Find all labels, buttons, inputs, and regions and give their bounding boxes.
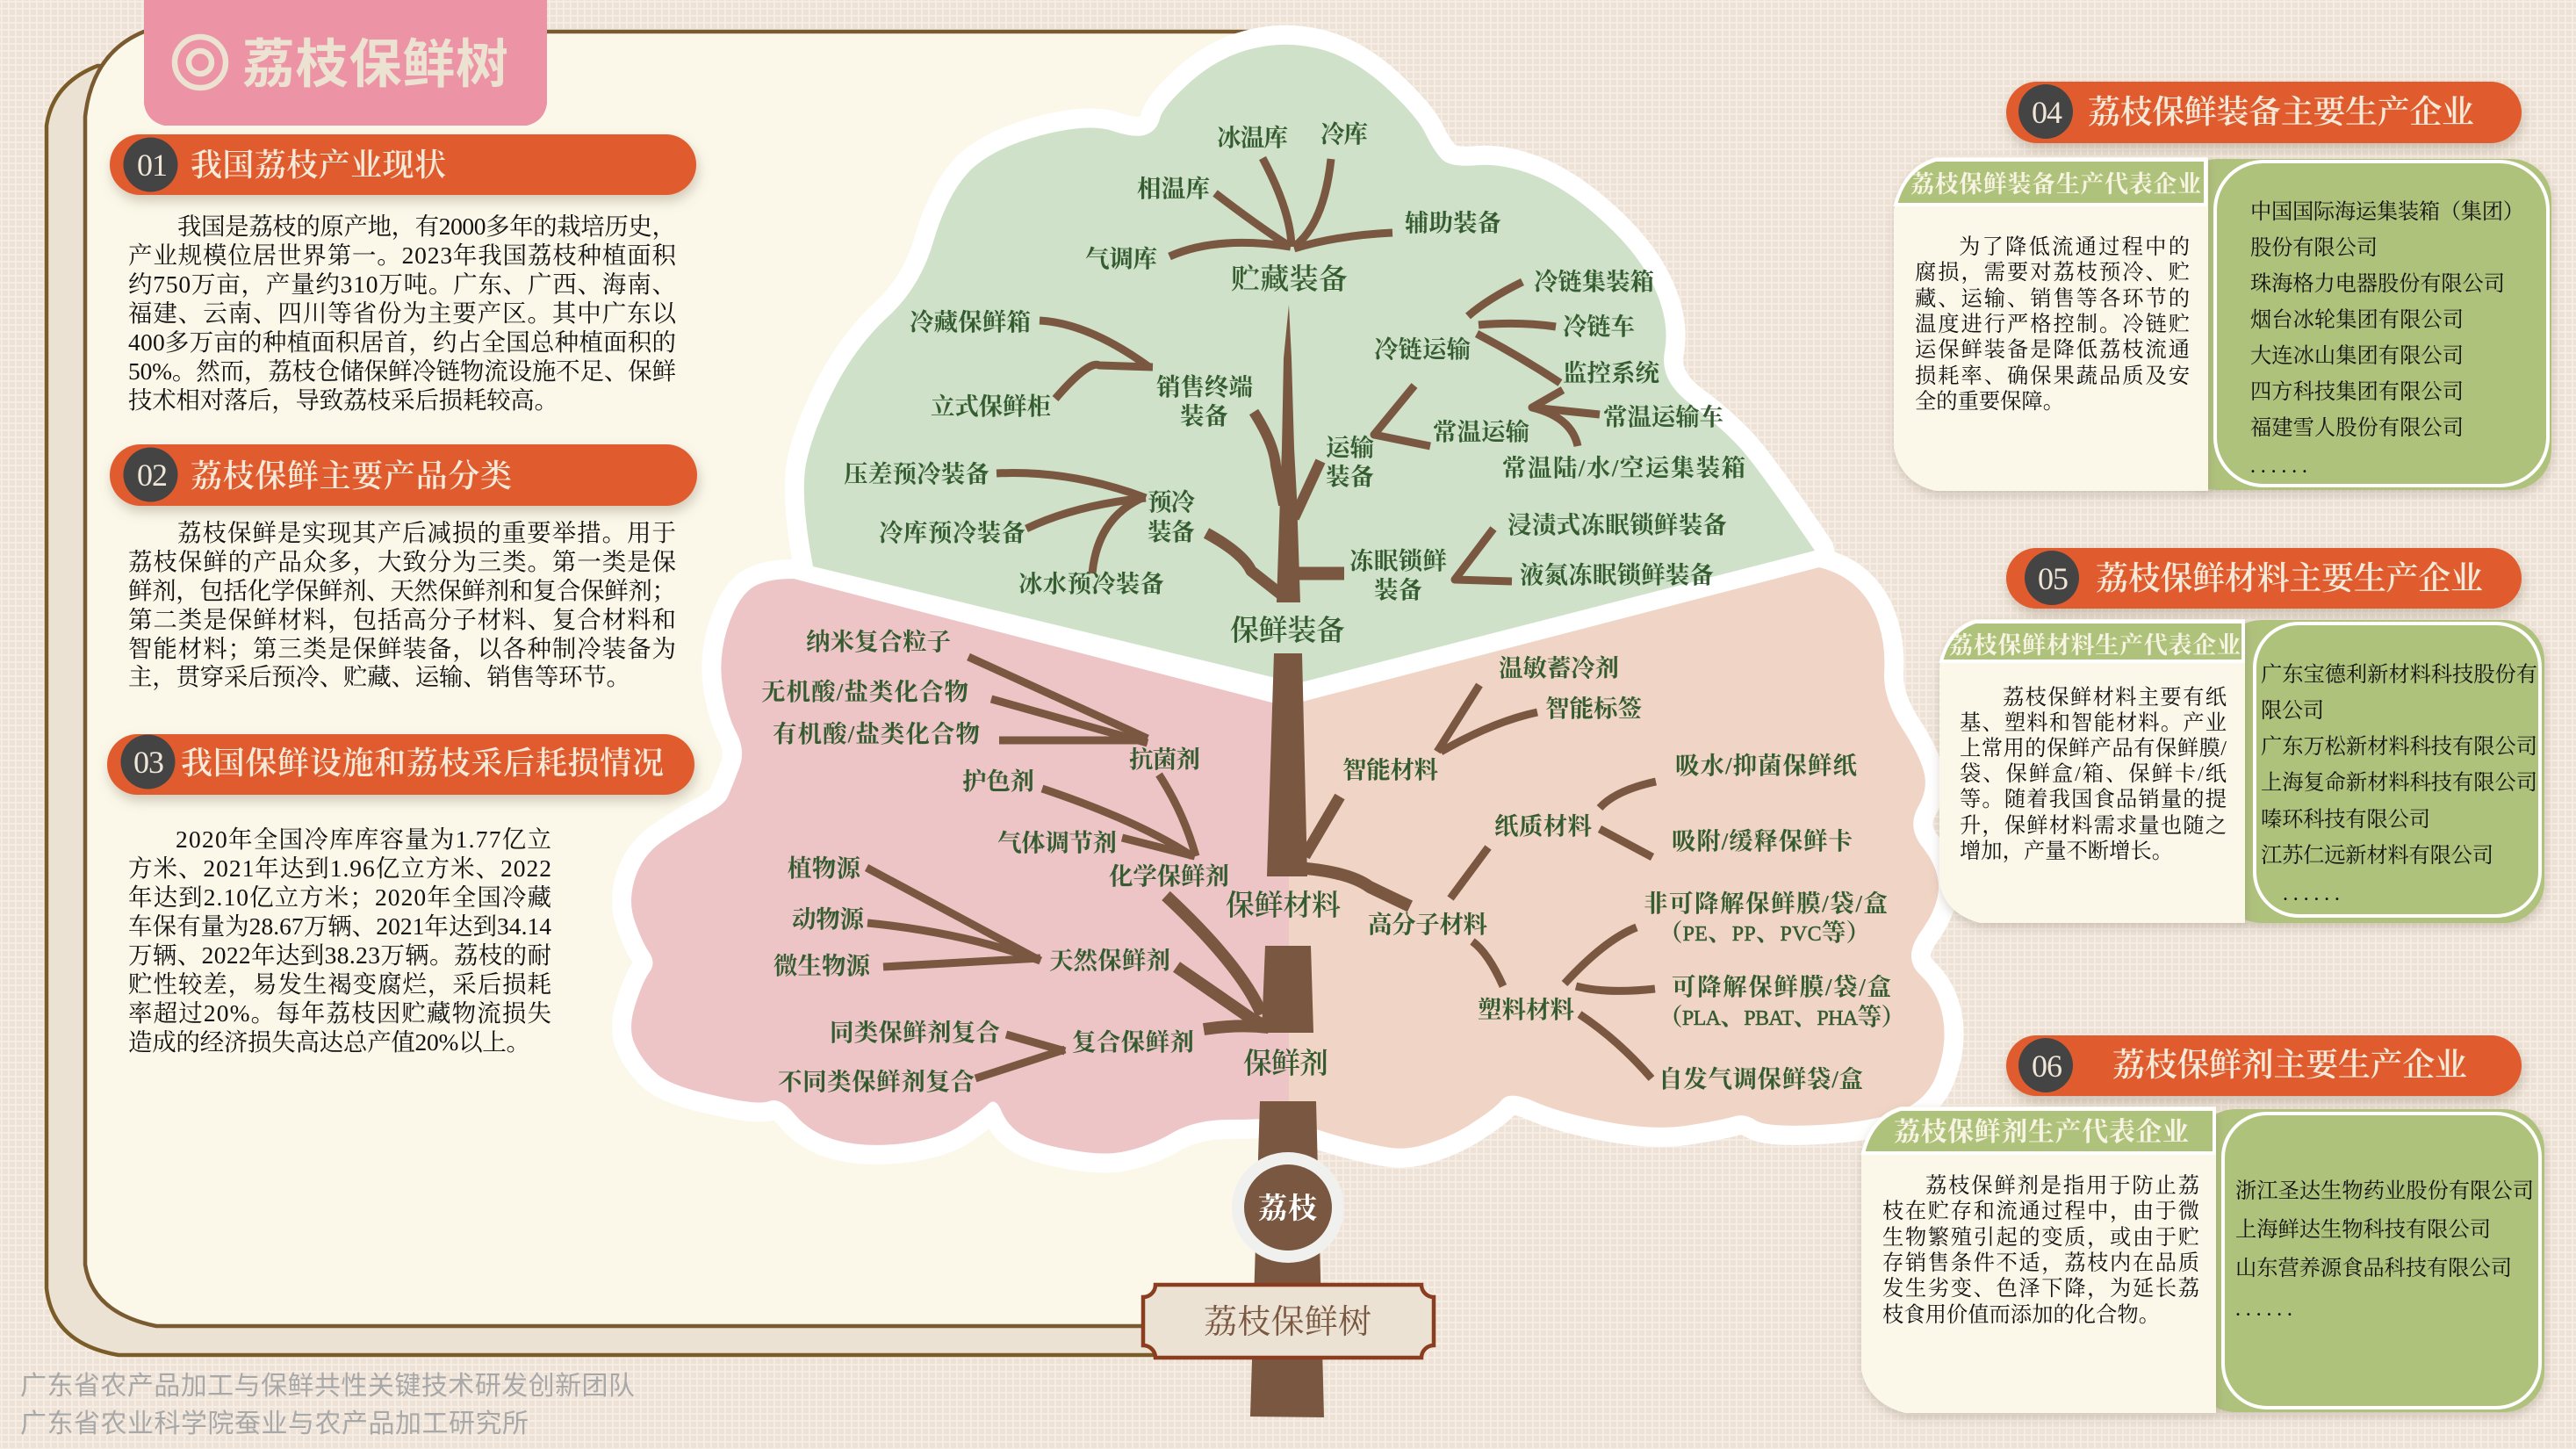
description: 生物繁殖引起的变质，或由于贮 — [1882, 1226, 2199, 1250]
title tab — [144, 0, 547, 126]
labels: agents: 化学保鲜剂 — [1109, 862, 1229, 890]
labels: agents: 不同类保鲜剂复合 — [778, 1068, 975, 1095]
heading 05: 荔枝保鲜材料主要生产企业 — [2096, 560, 2483, 597]
description: 基、塑料和智能材料。产业 — [1960, 711, 2227, 735]
heading 06: 06 — [2032, 1049, 2062, 1084]
heading 03: 我国保鲜设施和荔枝采后耗损情况 — [181, 746, 664, 781]
text block 01: 产业规模位居世界第一。2023年我国荔枝种植面积 — [128, 242, 678, 269]
heading 05: 05 — [2038, 561, 2069, 596]
icon: concentric target — [175, 37, 226, 88]
company list: 广东万松新材料科技有限公司 — [2261, 735, 2537, 759]
labels: agents: 微生物源 — [774, 952, 871, 979]
footer credits: 广东省农业科学院蚕业与农产品加工研究所 — [20, 1409, 529, 1438]
labels: equipment: 冷藏保鲜箱 — [910, 308, 1031, 335]
labels: agents: 抗菌剂 — [1129, 746, 1200, 773]
text block 01: 我国是荔枝的原产地，有2000多年的栽培历史， — [177, 213, 676, 240]
labels: equipment: 预冷 — [1148, 488, 1196, 515]
description: 枝食用价值而添加的化合物。 — [1882, 1303, 2160, 1327]
labels: equipment: 冷链集装箱 — [1534, 268, 1654, 295]
labels: agents: 气体调节剂 — [997, 829, 1117, 856]
description: 荔枝保鲜材料主要有纸 — [2003, 686, 2227, 710]
section 02: product categories — [110, 444, 697, 690]
labels: equipment: 贮藏装备 — [1231, 263, 1348, 296]
labels: equipment: 常温运输 — [1433, 418, 1529, 445]
title text: 荔枝保鲜树 — [242, 35, 508, 94]
heading 01: 我国荔枝产业现状 — [191, 148, 446, 183]
labels: equipment: 冷链车 — [1563, 313, 1635, 340]
labels: materials: 吸水/抑菌保鲜纸 — [1675, 752, 1858, 779]
text block 03: 方米、2021年达到1.96亿立方米、2022 — [128, 854, 551, 882]
text block 03: 2020年全国冷库库容量为1.77亿立 — [176, 825, 551, 853]
company list: 烟台冰轮集团有限公司 — [2250, 308, 2464, 332]
text block 02: 第二类是保鲜材料，包括高分子材料、复合材料和 — [128, 606, 676, 633]
branches: materials — [1296, 685, 1656, 1078]
text block 02: 鲜剂，包括化学保鲜剂、天然保鲜剂和复合保鲜剂； — [128, 577, 676, 604]
text block 01: 400多万亩的种植面积居首，约占全国总种植面积的 — [128, 328, 676, 356]
text block 03: 贮性较差，易发生褐变腐烂，采后损耗 — [128, 970, 551, 998]
crown: preservation materials (peach) — [1289, 567, 1945, 1149]
description: 温度进行严格控制。冷链贮 — [1915, 313, 2190, 336]
labels: materials: 智能材料 — [1342, 756, 1438, 783]
company list: 珠海格力电器股份有限公司 — [2250, 272, 2505, 296]
labels: equipment: 冰水预冷装备 — [1018, 570, 1164, 597]
company list: 嗪环科技有限公司 — [2261, 808, 2430, 832]
labels: materials: （PE、PP、PVC等） — [1659, 919, 1870, 946]
text block 02: 智能材料；第三类是保鲜装备，以各种制冷装备为 — [128, 635, 676, 662]
text block 02 — [128, 519, 676, 690]
card header: 荔枝保鲜剂生产代表企业 — [1894, 1118, 2189, 1147]
panel: left back page — [47, 32, 1291, 1355]
crown: preservation agents (pink) — [631, 579, 1289, 1154]
company list: 浙江圣达生物药业股份有限公司 — [2235, 1179, 2534, 1203]
labels: equipment: 冷链运输 — [1374, 335, 1471, 363]
section 01: industry status — [110, 134, 696, 414]
heading 06: 荔枝保鲜剂主要生产企业 — [2112, 1047, 2467, 1084]
labels: equipment: 常温运输车 — [1603, 403, 1723, 430]
heading 01: 01 — [137, 148, 168, 183]
labels: equipment: 监控系统 — [1563, 359, 1661, 386]
labels: agents: 有机酸/盐类化合物 — [773, 720, 980, 747]
labels: equipment: 运输 — [1326, 434, 1374, 461]
labels: equipment: 浸渍式冻眠锁鲜装备 — [1507, 511, 1727, 538]
description: 为了降低流通过程中的 — [1959, 235, 2190, 259]
labels: equipment — [844, 120, 1745, 647]
company list: 上海复命新材料科技有限公司 — [2261, 771, 2537, 795]
description: 枝在贮存和流通过程中，由于微 — [1882, 1200, 2199, 1223]
heading 05 — [2006, 548, 2522, 609]
card header — [1863, 1109, 2214, 1153]
text block 01: 技术相对落后，导致荔枝采后损耗较高。 — [128, 386, 558, 414]
text block 01 — [128, 213, 678, 414]
text block 02: 荔枝保鲜的产品众多，大致分为三类。第一类是保 — [128, 548, 676, 575]
labels: equipment: 装备 — [1326, 463, 1374, 490]
description: 袋、保鲜盒/箱、保鲜卡/纸 — [1960, 762, 2227, 786]
company list: 江苏仁远新材料有限公司 — [2261, 844, 2493, 868]
footer credits — [20, 1372, 635, 1438]
labels: equipment: 保鲜装备 — [1230, 615, 1345, 647]
labels: agents: 保鲜材料 — [1226, 890, 1341, 922]
footer credits: 广东省农产品加工与保鲜共性关键技术研发创新团队 — [20, 1372, 635, 1401]
labels: materials: 吸附/缓释保鲜卡 — [1672, 827, 1853, 854]
heading 04 — [2006, 82, 2522, 143]
labels: materials: 自发气调保鲜袋/盒 — [1659, 1065, 1863, 1092]
labels: equipment: 装备 — [1148, 518, 1195, 545]
description: 发生劣变、色泽下降，为延长荔 — [1882, 1277, 2199, 1301]
labels: materials: （PLA、PBAT、PHA等） — [1659, 1003, 1905, 1030]
labels: equipment: 装备 — [1180, 402, 1228, 429]
description: 运保鲜装备是降低荔枝流通 — [1915, 338, 2190, 362]
labels: equipment: 冷库 — [1320, 120, 1368, 148]
company list — [2215, 162, 2548, 486]
labels: materials: 温敏蓄冷剂 — [1499, 654, 1619, 681]
description: 上常用的保鲜产品有保鲜膜/ — [1960, 737, 2227, 761]
text block 03: 车保有量为28.67万辆、2021年达到34.14 — [128, 912, 551, 940]
description: 荔枝保鲜剂是指用于防止荔 — [1925, 1174, 2199, 1198]
company list: 广东宝德利新材料科技股份有 — [2261, 663, 2537, 687]
labels: agents: 无机酸/盐类化合物 — [761, 678, 968, 705]
text block 03 — [128, 825, 551, 1056]
crown: preservation equipment (green) — [804, 45, 1815, 683]
description — [1960, 686, 2227, 863]
labels: equipment: 气调库 — [1085, 245, 1157, 272]
company list: 福建雪人股份有限公司 — [2250, 416, 2464, 440]
labels: agents: 动物源 — [792, 905, 866, 933]
labels: equipment: 常温陆/水/空运集装箱 — [1502, 454, 1745, 481]
branches: agents — [867, 657, 1269, 1078]
labels: equipment: 装备 — [1374, 576, 1422, 603]
plaque: tree name — [1143, 1285, 1434, 1358]
labels: equipment: 冷库预冷装备 — [879, 519, 1025, 546]
heading 02 — [110, 444, 697, 506]
text block 03: 率超过20%。每年荔枝因贮藏物流损失 — [128, 999, 551, 1027]
description: 等。随着我国食品销量的提 — [1960, 788, 2227, 811]
labels: agents: 保鲜剂 — [1243, 1048, 1328, 1080]
card header: 荔枝保鲜材料生产代表企业 — [1949, 631, 2241, 659]
labels: equipment: 相温库 — [1137, 175, 1210, 202]
description — [1915, 235, 2190, 414]
text block 01: 50%。然而，荔枝仓储保鲜冷链物流设施不足、保鲜 — [128, 357, 676, 385]
heading 04: 04 — [2032, 95, 2062, 130]
labels: materials: 可降解保鲜膜/袋/盒 — [1672, 973, 1891, 1000]
labels: materials: 智能标签 — [1545, 695, 1642, 722]
company list: 中国国际海运集装箱（集团） — [2250, 200, 2524, 224]
description: 全的重要保障。 — [1915, 390, 2064, 414]
company list: 股份有限公司 — [2250, 236, 2378, 260]
company list: 限公司 — [2261, 699, 2324, 723]
labels: agents — [761, 628, 1341, 1095]
description: 损耗率、确保果蔬品质及安 — [1915, 364, 2190, 388]
section 03: facilities and losses — [107, 734, 694, 1056]
company list — [2223, 1114, 2540, 1408]
heading 06 — [2006, 1035, 2522, 1096]
text block 01: 约750万亩，产量约310万吨。广东、广西、海南、 — [128, 270, 676, 298]
text block 03: 造成的经济损失高达总产值20%以上。 — [128, 1028, 530, 1056]
heading 03 — [107, 734, 694, 795]
heading 04: 荔枝保鲜装备主要生产企业 — [2088, 94, 2474, 131]
card 06 — [1861, 1107, 2544, 1413]
labels: agents: 天然保鲜剂 — [1049, 947, 1170, 974]
card header: 荔枝保鲜装备生产代表企业 — [1910, 170, 2201, 198]
description: 藏、运输、销售等各环节的 — [1915, 286, 2190, 311]
heading 03: 03 — [133, 745, 164, 780]
text block 02: 荔枝保鲜是实现其产后减损的重要举措。用于 — [177, 519, 676, 546]
company list: 四方科技集团有限公司 — [2250, 380, 2464, 404]
section 06: agent companies — [1861, 1035, 2544, 1413]
labels: equipment: 销售终端 — [1156, 373, 1253, 400]
labels: agents: 复合保鲜剂 — [1072, 1028, 1194, 1056]
text block 03: 万辆、2022年达到38.23万辆。荔枝的耐 — [128, 941, 551, 969]
company list — [2255, 624, 2540, 916]
labels: materials: 纸质材料 — [1494, 812, 1593, 840]
section 04: equipment companies — [1894, 82, 2551, 491]
card header — [1941, 622, 2243, 661]
heading 02: 荔枝保鲜主要产品分类 — [191, 458, 512, 494]
labels: materials: 非可降解保鲜膜/袋/盒 — [1644, 890, 1888, 917]
description: 升，保鲜材料需求量也随之 — [1960, 814, 2227, 838]
company list: 山东营养源食品科技有限公司 — [2235, 1257, 2512, 1280]
company list: 上海鲜达生物科技有限公司 — [2235, 1218, 2491, 1242]
company list: 大连冰山集团有限公司 — [2250, 344, 2464, 368]
labels: agents: 护色剂 — [962, 768, 1034, 795]
labels: materials — [1342, 654, 1905, 1092]
labels: equipment: 冻眠锁鲜 — [1349, 547, 1447, 574]
labels: equipment: 辅助装备 — [1405, 209, 1501, 236]
labels: agents: 纳米复合粒子 — [806, 628, 951, 655]
branches: equipment — [997, 158, 1600, 594]
card 04 — [1894, 157, 2551, 491]
labels: equipment: 液氮冻眠锁鲜装备 — [1520, 561, 1714, 588]
labels: materials: 塑料材料 — [1478, 996, 1575, 1023]
root badge: 荔枝 — [1232, 1152, 1344, 1263]
description — [1882, 1174, 2199, 1327]
text block 01: 福建、云南、四川等省份为主要产区。其中广东以 — [128, 299, 678, 327]
root badge: 荔枝: 荔枝 — [1258, 1193, 1317, 1225]
text block 03: 年达到2.10亿立方米；2020年全国冷藏 — [128, 883, 551, 911]
heading 02: 02 — [137, 458, 168, 493]
labels: agents: 植物源 — [788, 854, 862, 882]
labels: equipment: 冰温库 — [1217, 124, 1288, 151]
heading 01 — [110, 134, 696, 195]
labels: equipment: 立式保鲜柜 — [931, 393, 1051, 420]
tree trunk — [1250, 305, 1324, 1417]
company list: ...... — [2235, 1297, 2292, 1321]
labels: agents: 同类保鲜剂复合 — [830, 1019, 1000, 1046]
text block 02: 主，贯穿采后预冷、贮藏、运输、销售等环节。 — [128, 663, 630, 690]
card header — [1896, 160, 2205, 205]
chart: litchi preservation tree — [631, 45, 1945, 1417]
section 05: material companies — [1939, 548, 2544, 923]
description: 腐损，需要对荔枝预冷、贮 — [1915, 261, 2190, 285]
plaque: tree name: 荔枝保鲜树 — [1204, 1304, 1371, 1341]
labels: materials: 高分子材料 — [1368, 911, 1487, 938]
description: 存销售条件不适，荔枝内在品质 — [1882, 1251, 2199, 1275]
labels: equipment: 压差预冷装备 — [844, 460, 989, 487]
company list: ...... — [2250, 454, 2307, 478]
card 05 — [1939, 619, 2544, 923]
tree crown outlines — [631, 45, 1945, 1154]
description: 增加，产量不断增长。 — [1960, 840, 2173, 863]
company list: ...... — [2283, 882, 2340, 905]
